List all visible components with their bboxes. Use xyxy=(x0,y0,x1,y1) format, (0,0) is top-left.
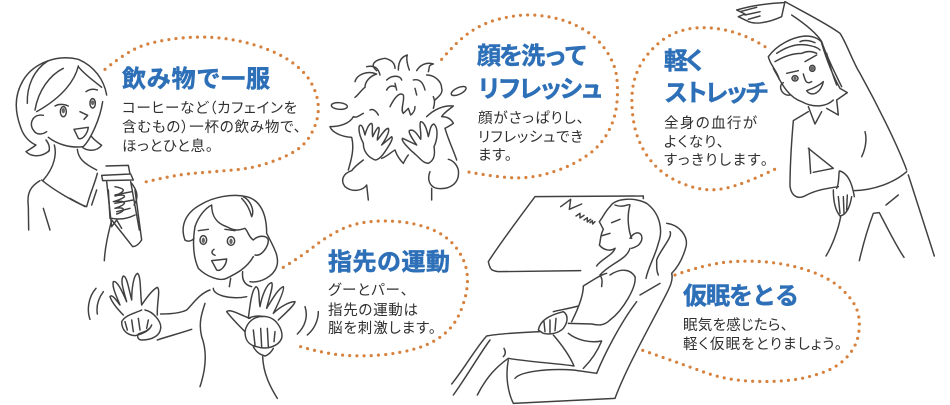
panel: stretch xyxy=(632,2,934,261)
illustration: woman exercising fingers xyxy=(88,195,318,398)
speech bubble outline xyxy=(642,261,859,382)
illustration: person splashing water on face xyxy=(330,55,467,200)
body text: ます。 xyxy=(478,147,512,164)
heading: ストレッチ xyxy=(664,80,769,107)
speech bubble outline xyxy=(632,28,780,190)
speech bubble outline xyxy=(283,221,467,356)
heading: 指先の運動 xyxy=(328,249,450,276)
panel: nap xyxy=(452,196,859,403)
body text: 指先の運動は xyxy=(328,302,418,319)
body text: リフレッシュでき xyxy=(478,129,583,146)
body text: ほっとひと息。 xyxy=(122,137,213,155)
body text: 脳を刺激します。 xyxy=(328,320,436,337)
body text xyxy=(683,317,842,353)
speech bubble outline xyxy=(442,15,617,178)
heading: 仮眠をとる xyxy=(683,283,799,310)
body text: 眠気を感じたら、 xyxy=(683,317,788,334)
illustration: man stretching sideways xyxy=(737,2,934,261)
heading: 軽く xyxy=(664,48,707,75)
body text: 全身の血行が xyxy=(664,115,758,132)
body text xyxy=(122,100,301,155)
panel: drink xyxy=(16,37,318,261)
body text: 軽く仮眠をとりましょう。 xyxy=(683,336,842,353)
illustration: woman napping in a reclining seat xyxy=(452,196,686,403)
heading xyxy=(664,48,769,107)
body text: 顔がさっぱりし、 xyxy=(478,110,584,127)
heading: 飲み物で一服 xyxy=(122,66,270,93)
body text xyxy=(664,115,768,169)
body text: コーヒーなど（カフェインを xyxy=(122,100,297,117)
body text: すっきりします。 xyxy=(664,152,768,169)
panel: face wash xyxy=(330,15,617,200)
body text xyxy=(478,110,584,164)
heading: リフレッシュ xyxy=(477,76,604,103)
illustration: woman holding a drink xyxy=(16,58,142,261)
heading xyxy=(477,43,604,103)
body text: グーとパー、 xyxy=(328,282,408,299)
heading: 顔を洗って xyxy=(477,43,588,70)
body text xyxy=(328,282,436,337)
body text: よくなり、 xyxy=(664,134,724,151)
panel: finger exercise xyxy=(88,195,467,398)
speech bubble outline xyxy=(105,37,318,183)
body text: 含むもの）一杯の飲み物で、 xyxy=(122,119,301,136)
